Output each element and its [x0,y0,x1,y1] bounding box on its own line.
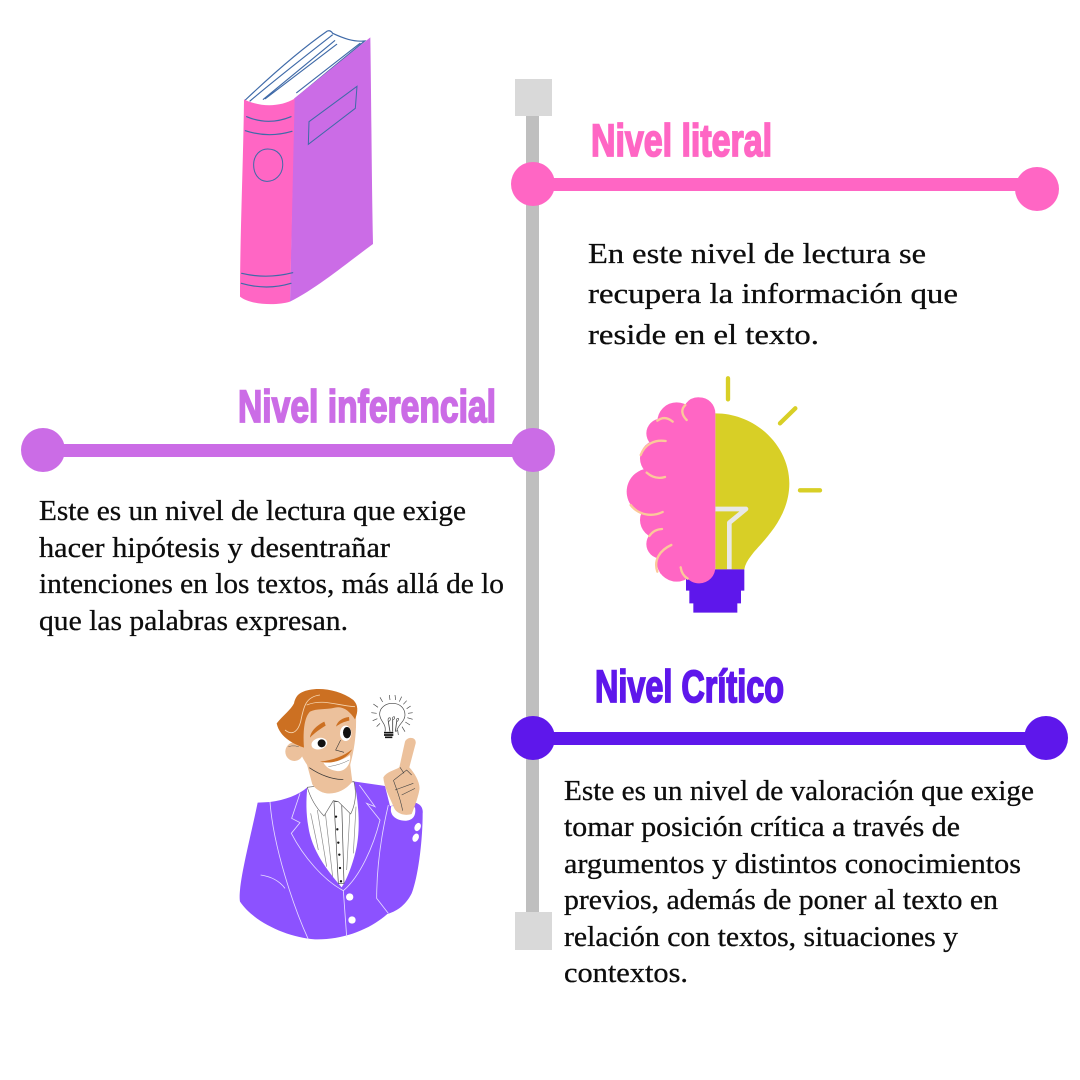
hand [383,738,420,815]
icon: book [240,31,373,304]
text block: critico [564,776,1034,989]
section: Nivel Crítico [511,661,1068,989]
face [298,702,356,780]
heading: Nivel inferencial: Nivel inferencial [238,381,496,432]
neck [307,763,352,794]
section: Nivel literal [511,115,1059,351]
text block: literal: recupera la información que [588,279,958,310]
icon: brain light bulb [627,378,820,613]
nose [336,740,344,752]
jacket seams [261,785,388,939]
text block: critico: previos, además de poner al texto en [564,885,998,916]
section: Nivel inferencial [21,381,555,637]
text block: critico: tomar posición crítica a través de [564,812,960,843]
timeline: vertical axis [515,79,552,950]
collar [307,782,356,816]
brows [310,717,349,738]
connector: pink line with dots [511,162,1059,211]
mustache [320,749,352,763]
heading: Nivel Crítico: Nivel Crítico [595,661,784,712]
text block: critico: contextos. [564,958,688,989]
body and hand [240,695,423,939]
connector: mauve line with dots [21,428,555,472]
illustration: man with idea [240,689,423,939]
small bulb [371,695,413,737]
ear [285,742,303,761]
text block: inferencial: Este es un nivel de lectura que exige [39,496,466,527]
text block: inferencial: hacer hipótesis y desentrañar [39,533,391,564]
text block: inferencial: que las palabras expresan. [39,606,348,637]
shirt [306,782,359,887]
eyes [310,736,329,751]
cuff [391,806,415,821]
text block: critico: relación con textos, situaciones y [564,922,959,953]
text block: literal: reside en el texto. [588,320,819,351]
text block: literal [588,239,958,351]
text block: literal: En este nivel de lectura se [588,239,926,270]
text block: inferencial [39,496,504,637]
buttons [346,822,422,924]
connector: violet line with dots [511,716,1068,760]
text block: critico: argumentos y distintos conocimientos [564,849,1021,880]
hair [277,689,357,748]
heading: Nivel literal: Nivel literal [591,115,772,166]
mouth [323,755,350,771]
text block: inferencial: intenciones en los textos, más allá de lo [39,569,504,600]
head [277,689,357,794]
text block: critico: Este es un nivel de valoración que exige [564,776,1034,807]
jacket [240,781,423,939]
